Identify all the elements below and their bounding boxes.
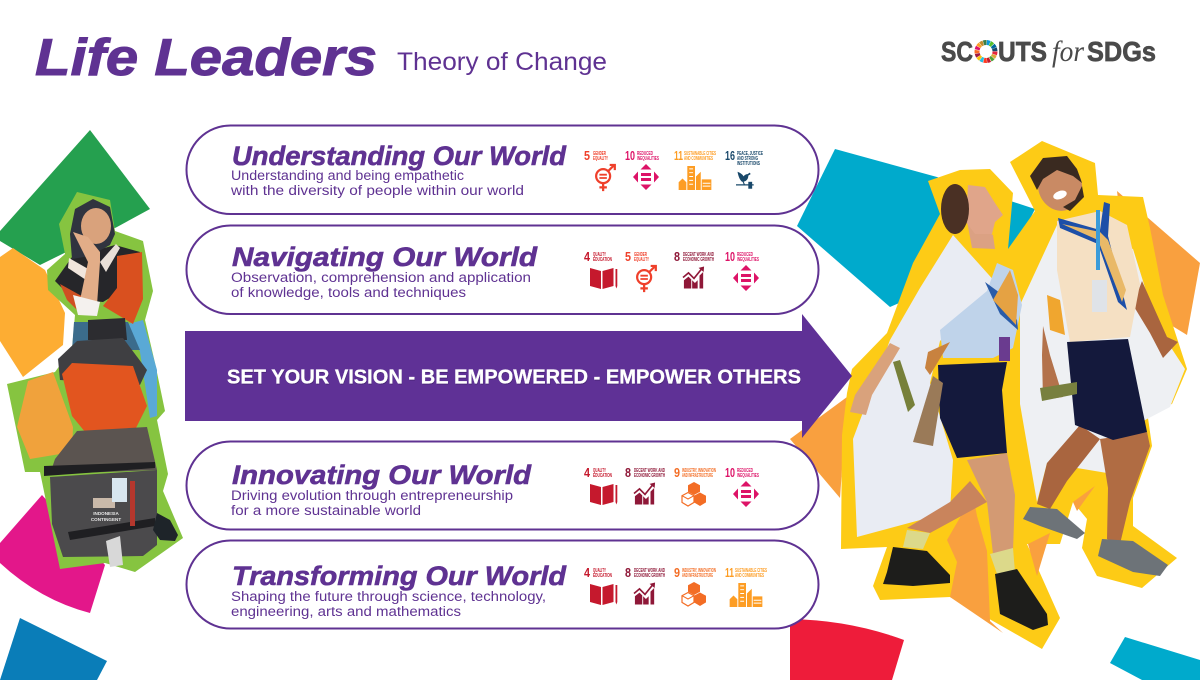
sdg icons: understanding: 5 xyxy=(584,148,590,163)
description: navigating: of knowledge, tools and techniques xyxy=(231,285,466,300)
sdg icons: understanding: INEQUALITIES xyxy=(637,156,659,162)
sdg icons: navigating: 5 xyxy=(625,249,631,264)
sdg icons: transforming: AND INFRASTRUCTURE xyxy=(682,573,713,579)
sdg icons: understanding: PEACE, JUSTICE xyxy=(737,151,763,157)
panel: innovating our world xyxy=(186,442,818,530)
arrow banner: SET YOUR VISION - BE EMPOWERED - EMPOWER OTHERS xyxy=(228,368,802,390)
description: innovating: for a more sustainable world xyxy=(231,503,421,518)
sdg icons: understanding: AND STRONG xyxy=(737,156,758,162)
sdg icons: transforming: 9 xyxy=(674,565,680,580)
photo: scout with luggage: INDONESIA xyxy=(93,511,119,516)
sdg icons: navigating: QUALITY xyxy=(593,252,606,258)
sdg icons: transforming: 8 xyxy=(625,565,631,580)
sdg icons: transforming: 4 xyxy=(584,565,591,580)
description: understanding: with the diversity of people within our world xyxy=(230,183,524,198)
photo: scout with luggage: CONTINGENT xyxy=(91,517,121,522)
sdg icons: understanding: EQUALITY xyxy=(593,156,608,162)
description: transforming: engineering, arts and mathematics xyxy=(231,604,461,619)
sdg icons: navigating: EQUALITY xyxy=(634,257,649,263)
description: understanding: Understanding and being empathetic xyxy=(231,168,464,183)
heading: innovating: Innovating Our World xyxy=(232,460,532,490)
sdg icons: navigating: 4 xyxy=(584,249,591,264)
sdg icons: navigating: GENDER xyxy=(634,252,647,258)
sdg icons: transforming: DECENT WORK AND xyxy=(634,568,665,574)
photo: two laughing scouts in capes xyxy=(841,141,1187,649)
photo: scout with luggage xyxy=(7,192,183,572)
heading: transforming: Transforming Our World xyxy=(232,561,567,591)
sdg icons: innovating: 8 xyxy=(625,465,631,480)
sdg icons: innovating: REDUCED xyxy=(737,468,753,474)
sdg icons: innovating: QUALITY xyxy=(593,468,606,474)
sdg icons: understanding: INSTITUTIONS xyxy=(737,161,760,167)
sdg icons: innovating: DECENT WORK AND xyxy=(634,468,665,474)
arrow banner xyxy=(185,314,852,438)
sdg icons: navigating: 10 xyxy=(725,249,735,264)
sdg icons: understanding: SUSTAINABLE CITIES xyxy=(684,151,716,157)
description: innovating xyxy=(231,488,513,518)
description: innovating: Driving evolution through entrepreneurship xyxy=(231,488,513,503)
subtitle: Theory of Change xyxy=(397,48,607,76)
sdg icons: innovating: 4 xyxy=(584,465,591,480)
description: understanding xyxy=(230,168,524,198)
panel: navigating our world xyxy=(186,226,818,314)
sdg icons: transforming: 11 xyxy=(725,565,734,580)
sdg icons: understanding: GENDER xyxy=(593,151,606,157)
sdg icons: transforming xyxy=(584,565,767,607)
sdg icons: transforming: EDUCATION xyxy=(593,573,612,579)
panel: transforming our world xyxy=(186,540,818,628)
sdg icons: understanding: AND COMMUNITIES xyxy=(684,156,713,162)
sdg icons: navigating: 8 xyxy=(674,249,680,264)
logo: Scouts for SDGs xyxy=(941,35,1156,68)
sdg icons: transforming: AND COMMUNITIES xyxy=(735,573,764,579)
sdg icons: understanding: 11 xyxy=(674,148,683,163)
description: navigating: Observation, comprehension and application xyxy=(231,270,531,285)
panel: understanding our world xyxy=(186,126,818,214)
sdg icons: understanding: 16 xyxy=(725,148,735,163)
sdg icons: innovating: INDUSTRY, INNOVATION xyxy=(682,468,716,474)
sdg icons: innovating: INEQUALITIES xyxy=(737,473,759,479)
sdg icons: navigating: ECONOMIC GROWTH xyxy=(683,257,714,263)
sdg icons: innovating: 10 xyxy=(725,465,735,480)
logo: Scouts for SDGs: for xyxy=(1052,35,1084,68)
description: transforming: Shaping the future through science, technology, xyxy=(231,589,546,604)
background shapes: left xyxy=(0,130,150,680)
description: navigating xyxy=(231,270,531,300)
sdg icons: transforming: ECONOMIC GROWTH xyxy=(634,573,665,579)
description: transforming xyxy=(231,589,546,619)
heading: understanding: Understanding Our World xyxy=(232,141,567,171)
sdg icons: transforming: INDUSTRY, INNOVATION xyxy=(682,568,716,574)
sdg icons: transforming: SUSTAINABLE CITIES xyxy=(735,568,767,574)
sdg icons: navigating: DECENT WORK AND xyxy=(683,252,714,258)
sdg icons: innovating: AND INFRASTRUCTURE xyxy=(682,473,713,479)
sdg icons: innovating: ECONOMIC GROWTH xyxy=(634,473,665,479)
arrow banner: SET YOUR VISION - BE EMPOWERED - EMPOWER OTHERS xyxy=(227,366,801,388)
sdg icons: understanding: REDUCED xyxy=(637,151,653,157)
sdg icons: navigating: REDUCED xyxy=(737,252,753,258)
sdg icons: understanding xyxy=(584,148,763,191)
sdg icons: innovating: 9 xyxy=(674,465,680,480)
sdg icons: transforming: QUALITY xyxy=(593,568,606,574)
background shapes: right xyxy=(790,149,1200,680)
title: Life Leaders xyxy=(35,29,377,87)
sdg icons: innovating: EDUCATION xyxy=(593,473,612,479)
sdg icons: navigating xyxy=(584,249,759,292)
sdg icons: innovating xyxy=(584,465,759,507)
logo: Scouts for SDGs: SC xyxy=(941,36,973,67)
sdg icons: navigating: EDUCATION xyxy=(593,257,612,263)
heading: navigating: Navigating Our World xyxy=(232,242,538,272)
logo: Scouts for SDGs: UTS xyxy=(998,36,1047,67)
sdg icons: navigating: INEQUALITIES xyxy=(737,257,759,263)
sdg icons: understanding: 10 xyxy=(625,148,635,163)
logo: Scouts for SDGs: SDGs xyxy=(1087,36,1156,67)
